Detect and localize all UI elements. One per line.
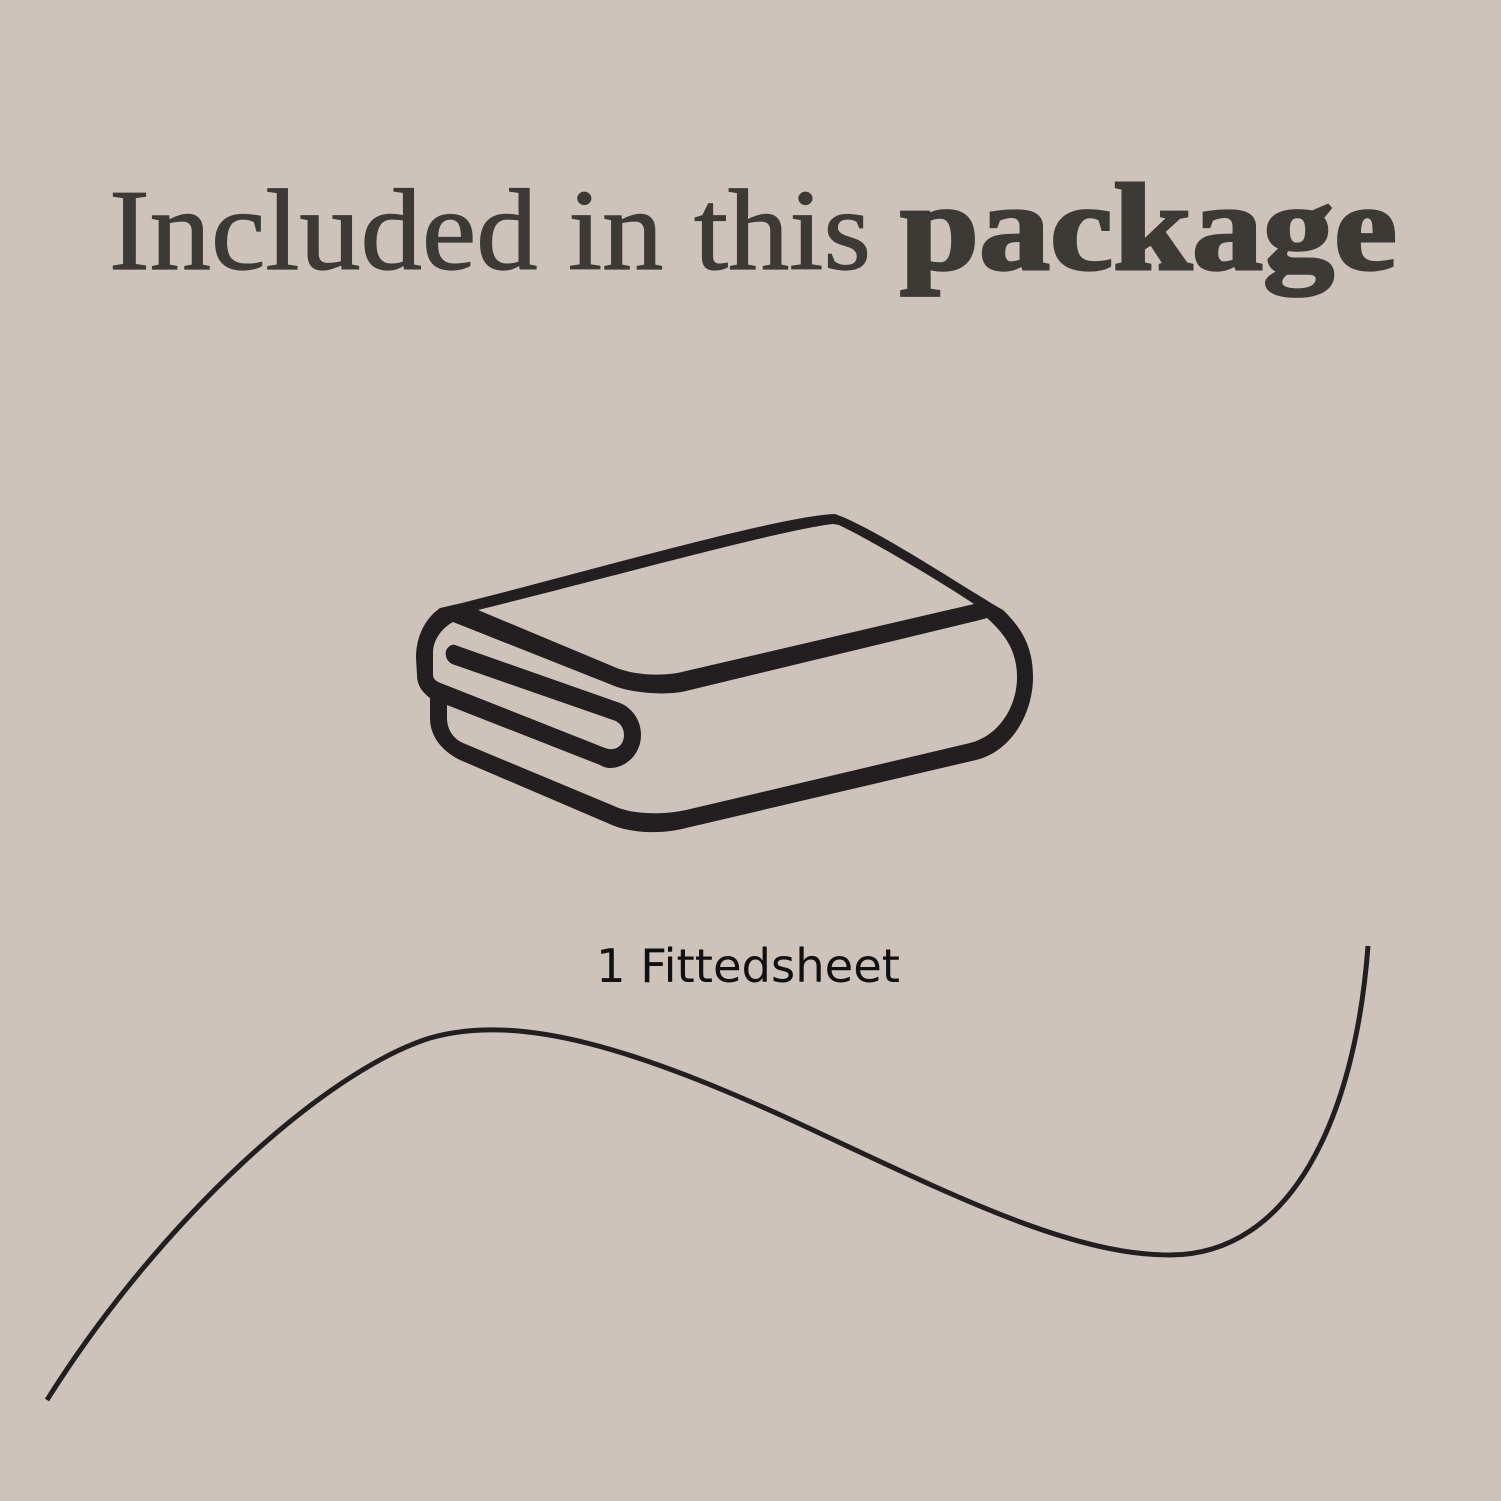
title: bold part: package (900, 159, 1397, 297)
decorative wavy curve (47, 946, 1368, 1400)
icon: inner fold (430, 645, 641, 768)
label: 1 Fittedsheet: 1 Fittedsheet (596, 939, 900, 993)
icon: top face (478, 524, 974, 675)
icon: folded fitted sheet (416, 514, 1033, 832)
icon silhouette (416, 514, 1033, 832)
icon: body and fold interior (433, 618, 1017, 813)
title (109, 159, 1397, 297)
title: regular part: Included in this (109, 167, 871, 295)
